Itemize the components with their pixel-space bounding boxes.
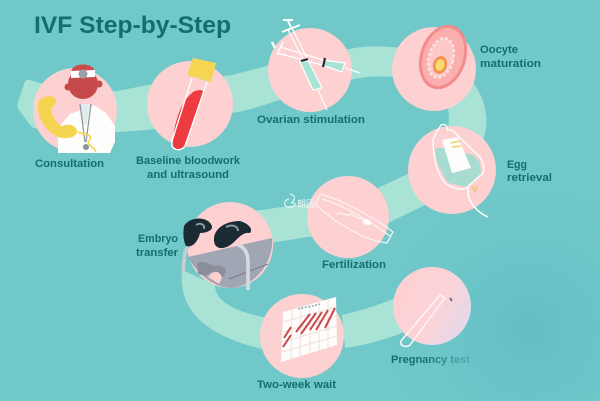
step 3: ovarian stimulation <box>268 20 360 112</box>
step 6: fertilization <box>307 176 393 258</box>
icon: oocyte <box>411 19 475 95</box>
icon: syringes <box>272 20 360 110</box>
label: baseline bloodwork and ultrasound: Baseline bloodwork <box>136 155 241 167</box>
icon: telephone handset <box>38 96 96 152</box>
winding path band <box>17 46 486 349</box>
label: pregnancy test: Pregnancy test <box>391 354 470 366</box>
title: IVF Step-by-Step <box>34 12 231 39</box>
label: oocyte maturation <box>480 44 541 70</box>
label: ovarian stimulation: Ovarian stimulation <box>257 114 365 126</box>
label: baseline bloodwork and ultrasound: and ultrasound <box>147 169 229 181</box>
watermark logo <box>285 194 315 209</box>
label: baseline bloodwork and ultrasound <box>136 155 241 181</box>
step 9: pregnancy test <box>393 267 471 346</box>
icon: test stick <box>401 295 452 346</box>
step 1: consultation <box>33 64 117 153</box>
label: consultation: Consultation <box>35 158 104 170</box>
label: egg retrieval: Egg <box>507 159 527 171</box>
step 4: oocyte maturation <box>392 19 476 111</box>
label: two-week wait: Two-week wait <box>257 379 336 391</box>
label: oocyte maturation: maturation <box>480 58 541 70</box>
label: egg retrieval: retrieval <box>507 172 552 184</box>
label: egg retrieval <box>507 159 552 184</box>
icon: blood tube <box>172 58 216 150</box>
label: embryo transfer: transfer <box>136 247 179 259</box>
label: embryo transfer: Embryo <box>138 233 178 245</box>
step 8: two-week wait <box>260 294 344 378</box>
icon: doctor <box>58 64 115 153</box>
icon: petri dish <box>316 194 393 243</box>
icon: IV bag <box>433 124 488 217</box>
watermark logo: 朗因 <box>297 198 315 209</box>
label: fertilization: Fertilization <box>322 259 386 271</box>
icon: gynecological chair and stirrups <box>183 218 272 290</box>
label: embryo transfer <box>136 233 179 259</box>
step 5: egg retrieval <box>408 124 496 217</box>
step 2: baseline bloodwork <box>147 58 233 150</box>
step 7: embryo transfer <box>183 202 273 290</box>
icon: calendar <box>281 297 337 362</box>
label: oocyte maturation: Oocyte <box>480 44 518 56</box>
